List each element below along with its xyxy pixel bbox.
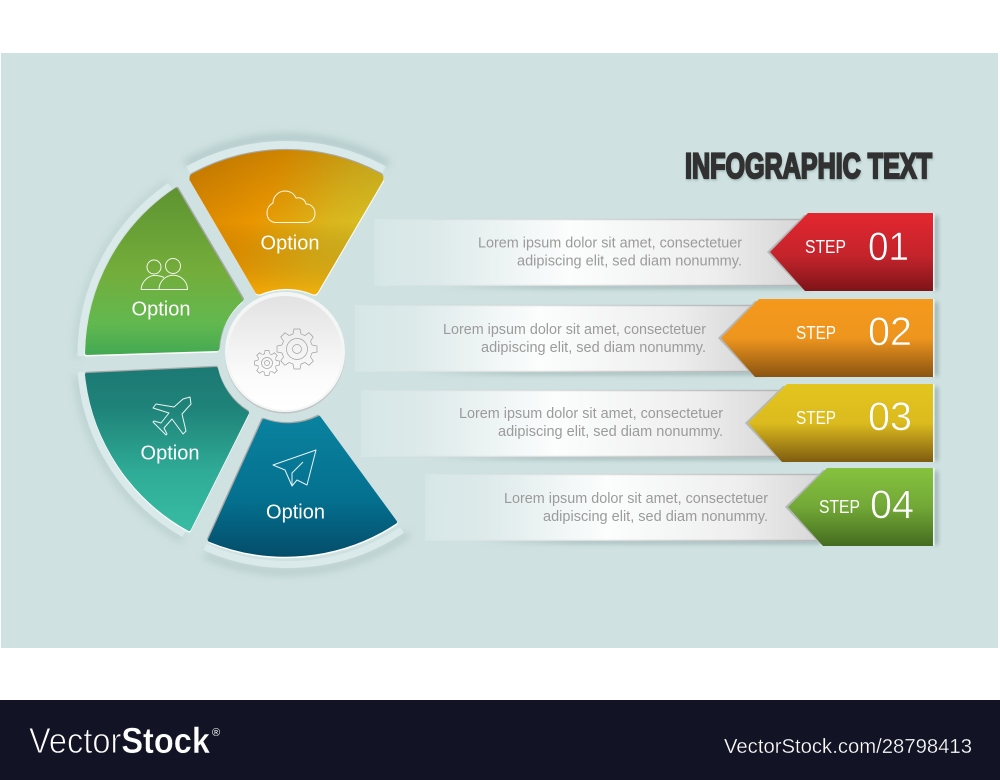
description: Lorem ipsum dolor sit amet, consectetuer bbox=[459, 405, 723, 422]
label: option: Option bbox=[261, 232, 319, 254]
tag highlight bbox=[933, 468, 934, 546]
description: adipiscing elit, sed diam nonummy. bbox=[481, 339, 706, 356]
segment: orange cloud option bbox=[186, 138, 388, 296]
step label: STEP bbox=[805, 237, 846, 257]
icon: people bbox=[141, 258, 188, 290]
description: adipiscing elit, sed diam nonummy. bbox=[543, 508, 768, 525]
step 01 row bbox=[374, 213, 938, 291]
step number: 04 bbox=[870, 483, 914, 527]
step number: 02 bbox=[868, 310, 912, 354]
icon: airplane bbox=[153, 397, 191, 435]
tag edge shadow bbox=[785, 470, 830, 544]
step label: STEP bbox=[796, 408, 836, 428]
step label: STEP bbox=[796, 323, 836, 343]
tag shadow right bbox=[934, 387, 938, 461]
tag highlight bbox=[933, 299, 934, 377]
description: adipiscing elit, sed diam nonummy. bbox=[517, 252, 742, 270]
tag highlight bbox=[933, 213, 934, 291]
ribbon edges bbox=[374, 220, 810, 286]
label: option: Option bbox=[132, 298, 190, 320]
label: option: Option bbox=[141, 442, 199, 464]
text ribbon bbox=[355, 305, 765, 372]
step tag bbox=[748, 384, 933, 462]
tag shadow right bbox=[934, 302, 938, 376]
step number: 01 bbox=[868, 225, 909, 269]
text ribbon bbox=[361, 390, 793, 457]
registered mark: ® bbox=[212, 727, 220, 739]
background panel bbox=[1, 53, 998, 648]
ribbon shadow bbox=[480, 540, 820, 544]
ribbon shadow bbox=[440, 285, 810, 289]
icon: cloud bbox=[267, 191, 315, 222]
step 03 row bbox=[361, 384, 938, 462]
tag shadow right bbox=[934, 216, 938, 290]
center gear hub bbox=[225, 292, 345, 414]
step 04 row bbox=[425, 468, 938, 546]
icon: large gear bbox=[277, 329, 317, 369]
ribbon shadow bbox=[430, 456, 790, 460]
description: Lorem ipsum dolor sit amet, consectetuer bbox=[504, 490, 768, 507]
segment: blue paper plane option bbox=[205, 417, 408, 572]
footer image id: VectorStock.com/28798413 bbox=[724, 736, 972, 758]
ribbon shadow bbox=[420, 371, 765, 375]
tag highlight bbox=[933, 384, 934, 462]
step label: STEP bbox=[819, 497, 860, 517]
tag shadow right bbox=[934, 471, 938, 545]
step 02 row bbox=[355, 299, 938, 377]
tag edge shadow bbox=[718, 301, 762, 375]
footer bar bbox=[0, 700, 1000, 780]
step tag bbox=[788, 468, 933, 546]
ribbon edges bbox=[355, 306, 765, 372]
ribbon edges bbox=[361, 390, 793, 456]
step number: 03 bbox=[868, 395, 912, 439]
step tag bbox=[770, 213, 933, 291]
step tag bbox=[721, 299, 933, 377]
ribbon edges bbox=[425, 474, 830, 540]
description: adipiscing elit, sed diam nonummy. bbox=[498, 423, 723, 440]
text ribbon bbox=[374, 219, 810, 286]
label: option: Option bbox=[266, 502, 325, 524]
text ribbon bbox=[425, 474, 830, 541]
radial option diagram bbox=[77, 138, 408, 572]
footer logo: VectorStock bbox=[29, 720, 211, 761]
segment: teal plane option bbox=[77, 368, 247, 540]
description: Lorem ipsum dolor sit amet, consectetuer bbox=[478, 234, 742, 252]
description: Lorem ipsum dolor sit amet, consectetuer bbox=[443, 321, 706, 338]
icon: paper plane bbox=[273, 450, 316, 486]
tag edge shadow bbox=[767, 215, 810, 289]
segment: green people option bbox=[77, 182, 242, 358]
tag edge shadow bbox=[745, 386, 790, 460]
icon: small gear bbox=[254, 350, 280, 376]
